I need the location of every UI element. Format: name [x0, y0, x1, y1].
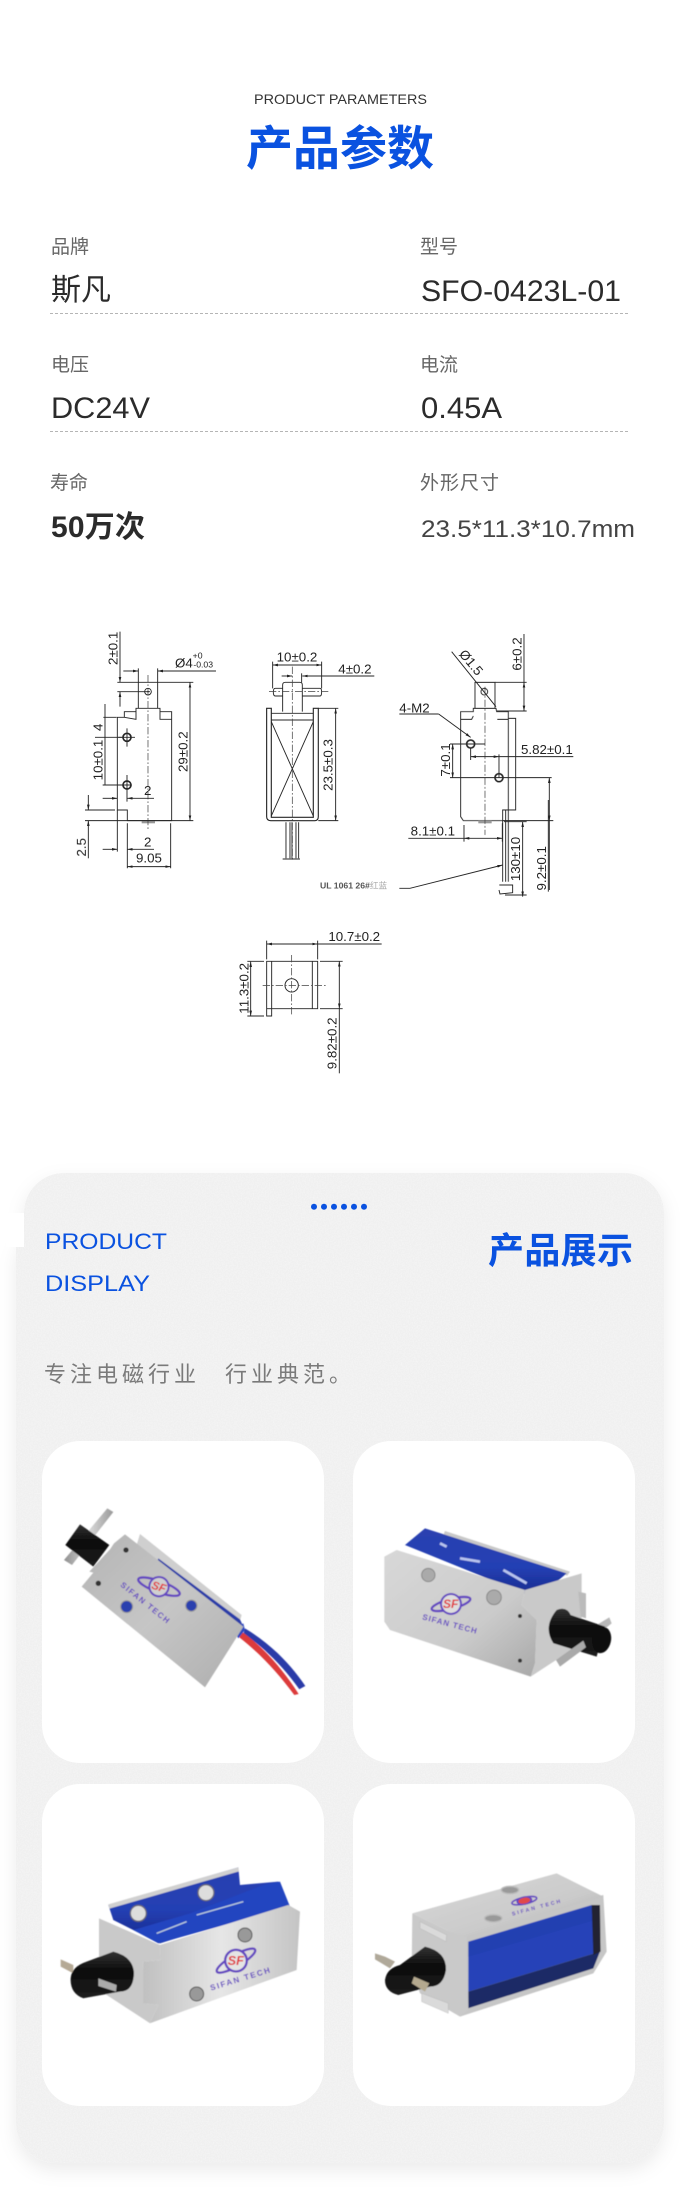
product photo: solenoid open side view: SIFAN TECH [209, 1966, 271, 1993]
spec: lifetime: 寿命 [50, 472, 88, 494]
title: 产品参数: 产品参数 [246, 122, 434, 175]
technical drawing: right view: 8.1±0.1 [411, 824, 455, 839]
spec: model: 型号 [420, 236, 458, 258]
technical drawing: right view: 130±10 [508, 837, 523, 881]
panel: specification table [50, 236, 635, 544]
decorative dots heading marker [311, 1204, 367, 1210]
logo: SF [150, 1580, 168, 1596]
product photo: solenoid logo face view: SIFAN TECH [421, 1613, 478, 1636]
product photo: solenoid coil window view [375, 1873, 607, 2017]
card 1 [42, 1441, 324, 1763]
product photo: solenoid coil window view: SIFAN TECH [511, 1899, 561, 1918]
technical drawing: side view: 2 [144, 835, 151, 850]
technical drawing: end view: 10.7±0.2 [328, 929, 380, 944]
technical drawing: front view: 10±0.2 [277, 650, 317, 665]
logo [136, 1574, 182, 1599]
product photo: solenoid open side view [61, 1867, 300, 2023]
heading: product display english [45, 1229, 167, 1296]
technical drawing: side view: 9.05 [136, 851, 162, 866]
technical drawing: wire lead and callout [320, 800, 549, 897]
technical drawing: side view: Ø4 [175, 655, 193, 670]
spec: voltage [51, 354, 150, 425]
heading: 产品展示: 产品展示 [488, 1230, 633, 1271]
card 2 [353, 1441, 635, 1763]
technical drawing: side view [74, 632, 216, 868]
technical drawing: side view: 10±0.1 [91, 740, 106, 780]
technical drawing: right view [399, 634, 573, 890]
tagline: 行业典范。 [225, 1362, 355, 1387]
technical drawing: end view: 9.82±0.2 [325, 1017, 340, 1069]
spec: voltage: DC24V [51, 392, 150, 425]
spec: current: 电流 [420, 354, 458, 376]
technical drawing: front view: 23.5±0.3 [321, 739, 336, 791]
technical drawing: side view: 2±0.1 [106, 632, 121, 665]
spec: outline dimensions: 外形尺寸 [420, 472, 499, 494]
product photo: angled solenoid with wires: SIFAN TECH [119, 1580, 171, 1625]
technical drawing: side view: -0.03 [193, 659, 213, 669]
logo: SF [228, 1954, 244, 1968]
logo [511, 1895, 537, 1907]
spec: outline dimensions: 23.5*11.3*10.7mm [421, 516, 635, 543]
technical drawing: right view: Ø1.5 [456, 647, 486, 678]
technical drawing: right view: 4-M2 [399, 700, 430, 715]
technical drawing: right view: 6±0.2 [510, 637, 525, 671]
heading: product display english: PRODUCT [45, 1229, 167, 1254]
technical drawing: side view: 29±0.2 [175, 731, 190, 772]
technical drawing: end view: 11.3±0.2 [236, 963, 251, 1014]
logo [214, 1945, 258, 1977]
technical drawing: side view: 2.5 [74, 838, 89, 857]
technical drawing: side view: 2 [144, 783, 151, 798]
spec: brand: 品牌 [51, 236, 89, 258]
technical drawing: right view: 5.82±0.1 [521, 742, 573, 757]
spec: lifetime [50, 472, 145, 544]
technical drawing: wire lead and callout: UL 1061 26#红蓝 [320, 879, 388, 890]
logo [430, 1593, 472, 1615]
technical drawing: front view [267, 650, 374, 860]
card 4 [353, 1784, 635, 2106]
spec: current: 0.45A [421, 392, 502, 425]
logo: SF [443, 1597, 459, 1611]
technical drawing: end view [236, 929, 382, 1073]
tagline: 专注电磁行业 [44, 1362, 200, 1387]
product photo: solenoid logo face view [384, 1528, 614, 1677]
product photo: angled solenoid with wires [64, 1508, 305, 1695]
spec: lifetime: 50万次 [51, 511, 145, 544]
technical drawing: right view: 7±0.1 [438, 743, 453, 777]
panel: product display [6, 1173, 664, 2163]
technical drawing: wire lead and callout: 9.2±0.1 [534, 846, 549, 891]
subtitle: product parameters: PRODUCT PARAMETERS [254, 91, 427, 107]
spec: voltage: 电压 [51, 354, 89, 376]
technical drawing: front view: 4±0.2 [338, 661, 372, 676]
technical drawing: side view: 4 [91, 723, 106, 731]
spec: model: SFO-0423L-01 [421, 275, 621, 308]
spec: outline dimensions [420, 472, 635, 543]
spec: model [420, 236, 621, 308]
spec: current [420, 354, 502, 425]
spec: brand [51, 236, 111, 307]
card 3 [42, 1784, 324, 2106]
heading: product display english: DISPLAY [45, 1271, 150, 1296]
technical drawing: side view: +0 [193, 651, 203, 661]
spec: brand: 斯凡 [51, 274, 111, 307]
panel: product parameters header [246, 91, 434, 175]
